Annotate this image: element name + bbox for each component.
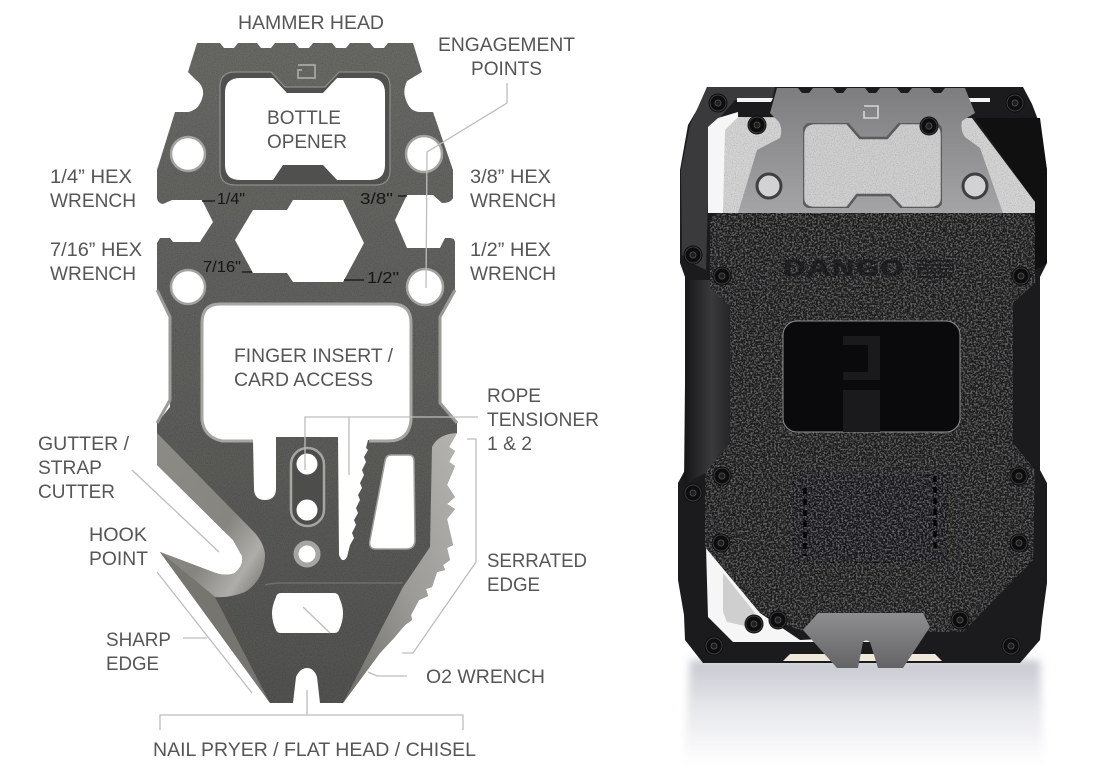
- tab hole 1: [296, 454, 318, 474]
- label: engagement points: POINTS: [471, 59, 542, 80]
- label: o2 wrench: O2 WRENCH: [426, 667, 545, 688]
- label: bottle opener: OPENER: [267, 132, 347, 153]
- finger insert hole: [203, 305, 410, 560]
- label: gutter strap cutter: CUTTER: [38, 482, 115, 503]
- multi-tool illustration: [157, 43, 457, 703]
- frame upper left rail: [681, 87, 775, 270]
- top tool D logo: [864, 106, 878, 118]
- label: bottle opener: [267, 108, 347, 153]
- etched size 1/4: 1/4": [217, 191, 245, 208]
- round hole lower left: [171, 270, 205, 304]
- top tool right hole: [963, 174, 987, 198]
- label: gutter strap cutter: GUTTER /: [38, 434, 130, 455]
- label: bottle opener: BOTTLE: [267, 108, 341, 129]
- label: engagement points: ENGAGEMENT: [438, 35, 575, 56]
- label: sharp edge: [106, 630, 171, 675]
- label: quarter inch hex: WRENCH: [50, 191, 136, 212]
- black textured panel: [705, 213, 1035, 632]
- D logo: [298, 65, 315, 78]
- chevron shading line: [265, 583, 403, 585]
- wallet frame: [678, 87, 1047, 663]
- label: gutter strap cutter: STRAP: [38, 458, 102, 479]
- label: three eighths hex: [470, 167, 556, 212]
- frame left side shading: [684, 280, 730, 485]
- outer chamfers: [157, 290, 457, 423]
- label: serrated edge: EDGE: [487, 575, 540, 596]
- trapezoid hole: [370, 455, 415, 549]
- label: serrated edge: SERRATED: [487, 551, 587, 572]
- label: hook point: POINT: [89, 549, 148, 570]
- bottom tool tip: [803, 613, 930, 668]
- label: finger insert: FINGER INSERT /: [234, 346, 394, 367]
- size tick marks: [202, 196, 407, 280]
- silver card upper: [723, 117, 1035, 213]
- label: hook point: HOOK: [89, 525, 147, 546]
- label: hammer head: HAMMER HEAD: [238, 13, 384, 34]
- screws: [684, 94, 1030, 656]
- finger hole rim: [202, 304, 411, 441]
- round hole lower right: [407, 269, 443, 305]
- strap stitches: [805, 476, 935, 556]
- left bevel: strap cutter: [157, 433, 265, 597]
- label: quarter inch hex: 1/4” HEX: [50, 167, 132, 188]
- bottle opener chamfer ring: [220, 72, 390, 185]
- hex wrench hole: [235, 200, 364, 282]
- white insert lower: [706, 547, 905, 642]
- table reflection: [684, 660, 1044, 765]
- panel flag mark: [917, 261, 953, 277]
- elastic strap: [793, 475, 948, 563]
- label: rope tensioner: TENSIONER: [487, 410, 599, 431]
- wallet photo: [678, 87, 1047, 765]
- right bevel: serrated edge: [343, 433, 457, 703]
- label: engagement points: [438, 35, 575, 80]
- panel logo: DANGO: [782, 255, 904, 284]
- label: finger insert: [234, 346, 394, 391]
- left bevel: hook and sharp edge: [160, 552, 270, 703]
- round hole top right: [406, 136, 442, 172]
- label: rope tensioner: [487, 386, 599, 455]
- label: sharp edge: EDGE: [106, 654, 159, 675]
- label: seven sixteenths hex: WRENCH: [50, 264, 136, 285]
- etched size 1/2: 1/2": [367, 270, 399, 287]
- label: seven sixteenths hex: 7/16” HEX: [50, 240, 142, 261]
- etched size 3/8: 3/8": [360, 191, 393, 208]
- label: gutter strap cutter: [38, 434, 130, 503]
- tab hole 3: [296, 543, 318, 565]
- tab slot ring: [291, 448, 324, 526]
- tab hole 2: [296, 500, 318, 520]
- tool body silhouette: [157, 43, 457, 703]
- label: half inch hex: WRENCH: [470, 264, 556, 285]
- label: three eighths hex: 3/8” HEX: [470, 167, 551, 188]
- etched size 7/16: 7/16": [203, 259, 241, 276]
- label: hook point: [89, 525, 148, 570]
- label: rope tensioner: 1 & 2: [487, 434, 532, 455]
- silver card lower: [723, 573, 755, 626]
- bottom light strip: [783, 654, 942, 661]
- bottle opener hole: [225, 78, 385, 180]
- card window: [783, 321, 960, 432]
- leader lines: [132, 83, 507, 730]
- label: half inch hex: [470, 240, 556, 285]
- label: half inch hex: 1/2” HEX: [470, 240, 551, 261]
- round hole top left: [171, 137, 205, 171]
- label: sharp edge: SHARP: [106, 630, 171, 651]
- frame right side shading: [975, 118, 1047, 270]
- label: seven sixteenths hex: [50, 240, 142, 285]
- label: serrated edge: [487, 551, 587, 596]
- label: nail pryer: NAIL PRYER / FLAT HEAD / CHISEL: [153, 740, 476, 761]
- O2 wrench hole: [272, 593, 343, 633]
- white insert upper: [708, 112, 740, 213]
- label: quarter inch hex: [50, 167, 136, 212]
- top tool left hole: [757, 174, 781, 198]
- label: three eighths hex: WRENCH: [470, 191, 556, 212]
- label: finger insert: CARD ACCESS: [234, 370, 373, 391]
- top white gaps: [737, 98, 990, 102]
- top tool opener hole: [803, 123, 942, 208]
- label: rope tensioner: ROPE: [487, 386, 541, 407]
- window inner logos: [843, 336, 880, 432]
- top tool: [738, 88, 1003, 213]
